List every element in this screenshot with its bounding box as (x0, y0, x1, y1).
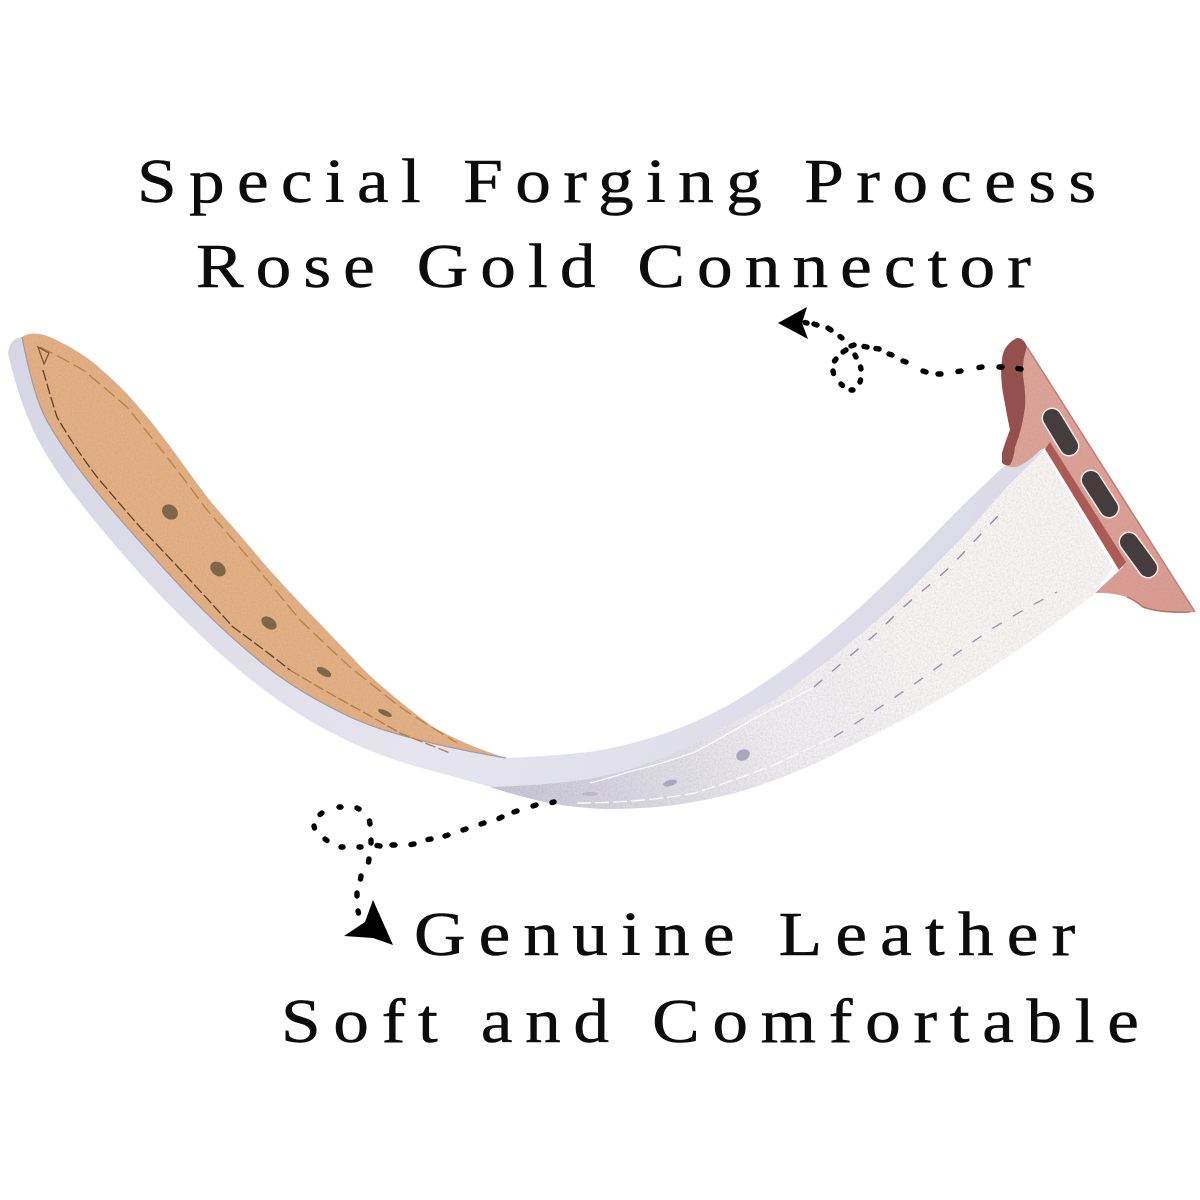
arrowhead (344, 900, 393, 945)
white face stitching (577, 512, 1057, 803)
connector shadowed side face (1001, 338, 1027, 465)
heading: rose gold connector (137, 147, 1096, 301)
dotted arrow to connector heading (778, 307, 1021, 390)
heading: genuine leather (281, 900, 1139, 1056)
watch strap (8, 334, 1113, 809)
connector body (1001, 338, 1195, 613)
arrowhead (778, 307, 808, 339)
white face buckle holes (582, 747, 752, 796)
dotted loop line (314, 802, 554, 913)
lining stitching (38, 347, 457, 753)
strap side edge (8, 337, 1093, 809)
rose gold connector (1001, 338, 1195, 613)
lining buckle holes (159, 501, 393, 719)
heading line: Special Forging Process: Special Forging Process (137, 147, 1096, 216)
connector rail channel (1045, 442, 1126, 570)
heading line: Rose Gold Connector: Rose Gold Connector (196, 232, 1031, 301)
dotted arrow to leather heading (314, 802, 554, 945)
dotted loop line (805, 322, 1021, 390)
tan leather lining (22, 334, 506, 758)
connector pin slots (1052, 418, 1148, 568)
lining edge line (22, 337, 506, 758)
heading line: Genuine Leather: Genuine Leather (414, 900, 1075, 969)
heading line: Soft and Comfortable: Soft and Comfortable (281, 987, 1139, 1056)
white leather face (490, 450, 1113, 809)
connector lower lip (1127, 597, 1190, 612)
connector bright edge (1027, 347, 1195, 612)
